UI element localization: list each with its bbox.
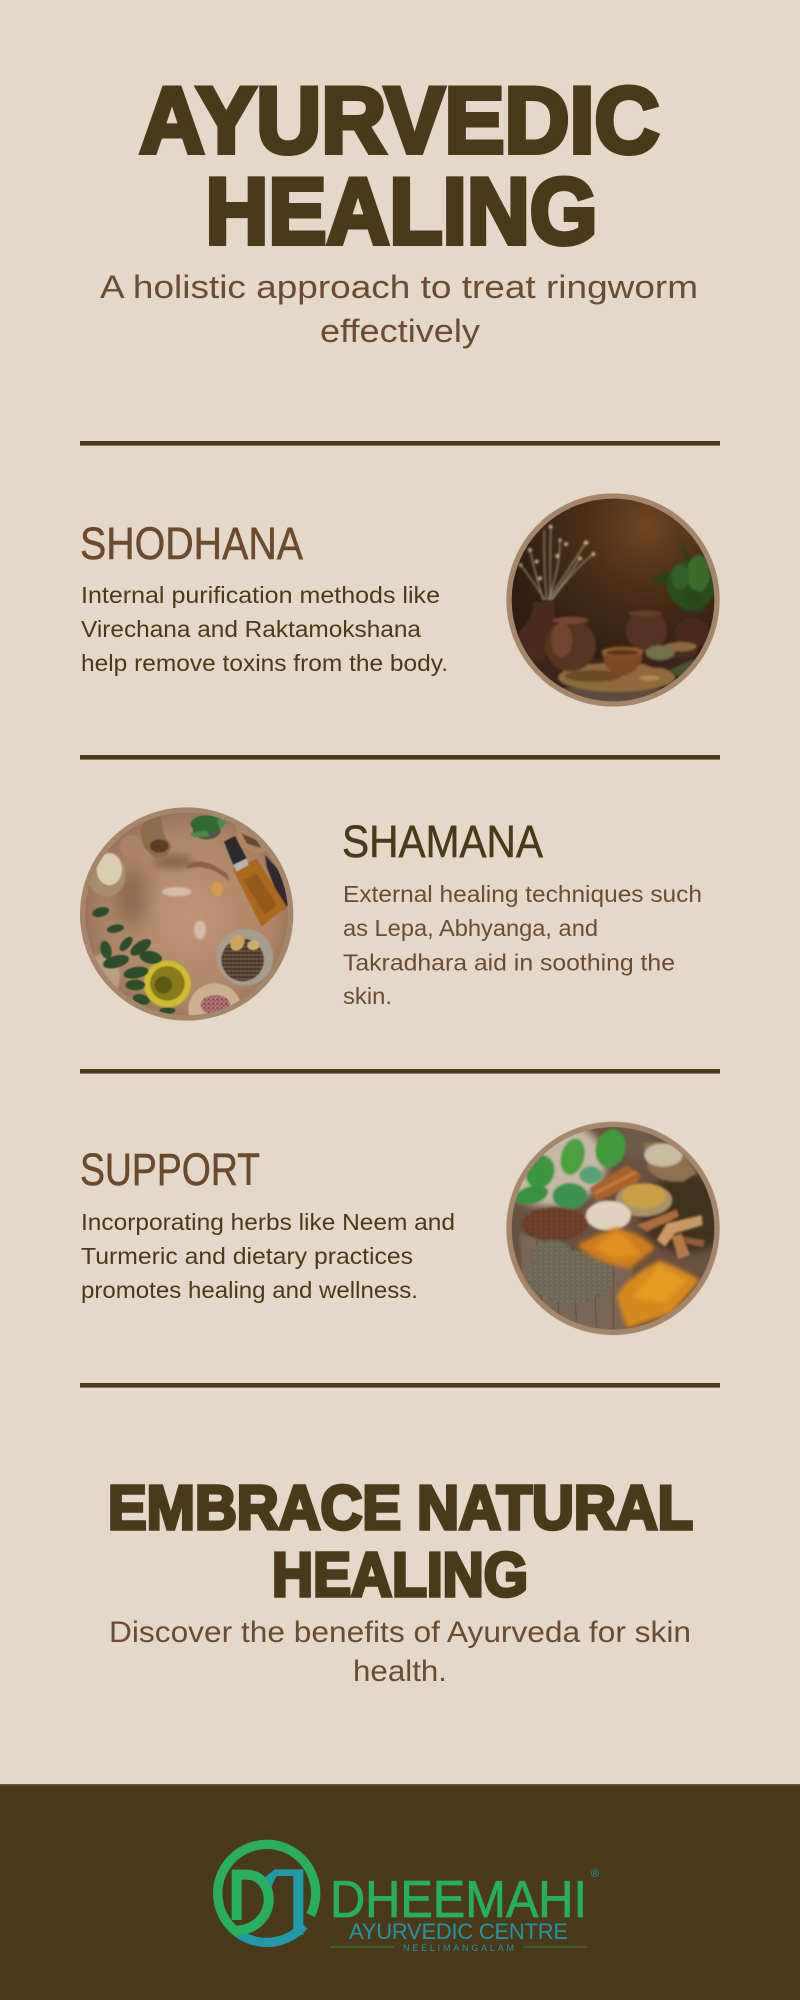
text: shodhana description (81, 582, 448, 676)
heading: support: SUPPORT (80, 1144, 260, 1195)
text: shamana description: skin. (343, 983, 392, 1009)
image: oils and herbs flat lay (80, 807, 294, 1021)
wordmark: DHEEMAHI (330, 1871, 587, 1929)
text: shodhana description: Virechana and Raktamokshana (81, 616, 421, 642)
closing text: health. (353, 1655, 447, 1688)
text: shamana description: External healing techniques such (343, 881, 702, 907)
icon: DM monogram ring (218, 1844, 316, 1942)
heading: shodhana: SHODHANA (80, 518, 303, 569)
closing heading: HEALING (272, 1541, 528, 1610)
registered mark: ® (591, 1868, 599, 1880)
heading: shamana: SHAMANA (342, 816, 543, 867)
text: support description (81, 1209, 455, 1303)
text: shamana description: Takradhara aid in soothing the (343, 950, 675, 976)
text: support description: Incorporating herbs like Neem and (81, 1209, 455, 1235)
subtitle: A holistic approach to treat ringworm (100, 269, 698, 305)
closing text: Discover the benefits of Ayurveda for skin (109, 1616, 691, 1649)
subtitle (100, 269, 698, 349)
text: support description: promotes healing and wellness. (81, 1277, 418, 1303)
text: shodhana description: help remove toxins from the body. (81, 650, 448, 676)
image: spices and turmeric (506, 1122, 720, 1336)
text: shamana description: as Lepa, Abhyanga, and (343, 915, 598, 941)
closing text (109, 1616, 691, 1688)
title (140, 68, 660, 264)
footer band (0, 1784, 800, 2000)
text: support description: Turmeric and dietary practices (81, 1243, 413, 1269)
location: NEELIMANGALAM (403, 1943, 514, 1953)
panel: support (80, 1117, 733, 1343)
text: shamana description (343, 881, 702, 1009)
tagline: AYURVEDIC CENTRE (349, 1919, 568, 1944)
image: clay pots and herbs (506, 493, 720, 707)
title: HEALING (206, 158, 598, 264)
title: AYURVEDIC (140, 68, 660, 172)
closing heading: EMBRACE NATURAL (108, 1474, 693, 1543)
subtitle: effectively (320, 313, 480, 349)
panel: shamana (73, 803, 702, 1037)
panel: shodhana (80, 490, 727, 718)
logo: Dheemahi Ayurvedic Centre (218, 1844, 599, 1953)
text: shodhana description: Internal purification methods like (81, 582, 440, 608)
closing heading (108, 1474, 693, 1610)
